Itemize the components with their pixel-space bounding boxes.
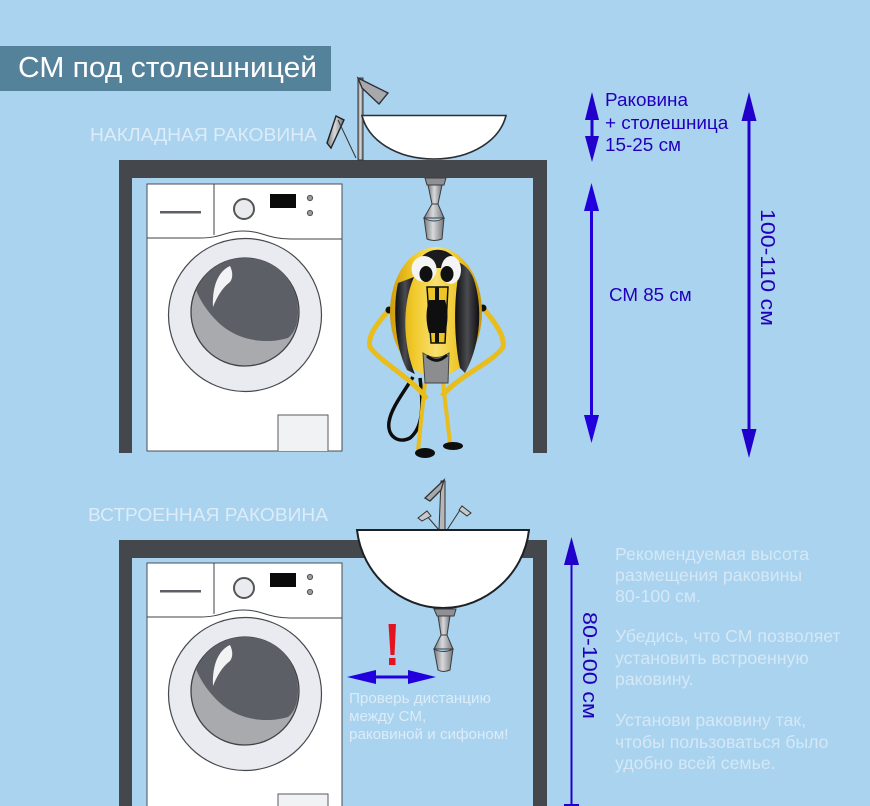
heading: overlay sink: НАКЛАДНАЯ РАКОВИНА [90,125,317,145]
title banner [0,46,331,91]
faucet: top [327,78,388,160]
heading: built-in sink: ВСТРОЕННАЯ РАКОВИНА [88,505,328,525]
note: check clearance: Проверь дистанцию [349,690,491,707]
text block: recommendations: установить встроенную [615,648,809,668]
text block: recommendations: Установи раковину так, [615,710,806,730]
basin: top [362,116,506,159]
note: check clearance: раковиной и сифоном! [349,726,508,743]
countertop frame: top [119,160,547,453]
label: washer height: СМ 85 см [609,284,692,305]
label: sink plus counter: 15-25 см [605,135,681,156]
arrow: washer height [584,183,599,443]
label: sink plus counter: + столешница [605,113,729,134]
note: check clearance: между СМ, [349,708,426,725]
text block: recommendations: размещения раковины [615,565,802,585]
basin: bottom [357,530,529,608]
arrow: clearance [347,670,436,684]
text block: recommendations: 80-100 см. [615,586,701,606]
arrow: sink plus counter height [585,92,599,162]
label: sink height: 80-100 см [578,612,600,719]
arrow: sink height [564,537,579,806]
label: sink plus counter: Раковина [605,90,688,111]
label: total height: 100-110 см [756,209,778,326]
siphon: bottom [434,609,456,672]
text block: recommendations: Рекомендуемая высота [615,544,809,564]
washing machine: top [147,184,342,451]
countertop frame: bottom [119,540,547,806]
title banner: СМ под столешницей [18,52,317,84]
washing machine: bottom [147,563,342,806]
siphon: top [424,178,446,240]
exclamation mark [388,624,396,665]
arrow: total height [742,92,756,458]
text block: recommendations: чтобы пользоваться было [615,732,829,752]
text block: recommendations [615,544,841,773]
text block: recommendations: Убедись, что СМ позволяет [615,626,841,646]
text block: recommendations: раковину. [615,669,693,689]
text block: recommendations: удобно всей семье. [615,753,776,773]
mascot: bee-like vacuum cleaner [369,247,503,458]
faucet: bottom [418,480,471,530]
